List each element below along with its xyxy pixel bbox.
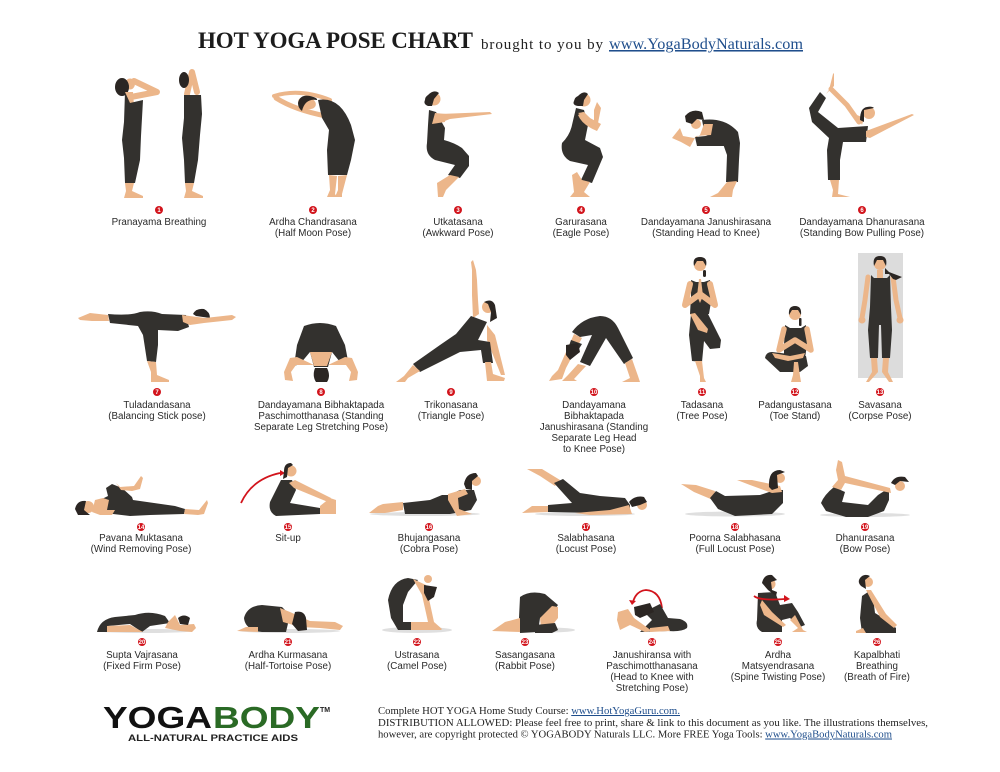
pose 2: Ardha Chandrasana <box>269 93 357 239</box>
label: (Full Locust Pose) <box>696 544 774 555</box>
label: (Fixed Firm Pose) <box>103 661 181 672</box>
badge: 12 <box>792 390 799 396</box>
badge: 21 <box>285 640 292 646</box>
label: Utkatasana <box>433 217 483 228</box>
pose 22: Ustrasana <box>382 575 452 672</box>
title: www.YogaBodyNaturals.com <box>609 36 803 53</box>
logo: YOGABODY <box>103 700 330 744</box>
figure <box>270 463 336 516</box>
badge <box>309 206 317 214</box>
figure <box>522 469 647 515</box>
figure <box>765 306 811 382</box>
badge: 16 <box>426 525 433 531</box>
badge <box>454 206 462 214</box>
label: Pavana Muktasana <box>99 533 183 544</box>
pose 16: Bhujangasana <box>369 473 481 555</box>
figure <box>672 111 740 197</box>
figure <box>858 256 904 382</box>
pose 5: Dandayamana Janushirasana <box>641 111 772 239</box>
label: (Head to Knee with <box>610 672 694 683</box>
label: (Camel Pose) <box>387 661 447 672</box>
badge: 8 <box>319 390 323 396</box>
logo: YOGABODY: TM <box>320 707 330 714</box>
footer text: however, are copyright protected © YOGABODY Naturals LLC. More FREE Yoga Tools: www.YogaBodyNaturals.com <box>378 730 892 740</box>
mat <box>858 253 903 378</box>
label: Dhanurasana <box>836 533 894 544</box>
label: Bhujangasana <box>398 533 460 544</box>
badge: 14 <box>138 525 145 531</box>
pose 1: Pranayama Breathing <box>112 72 206 228</box>
label: (Standing Bow Pulling Pose) <box>800 228 924 239</box>
logo: YOGABODY: ALL-NATURAL PRACTICE AIDS <box>128 733 298 744</box>
pose 19: Dhanurasana <box>820 460 910 555</box>
badge: 26 <box>874 640 881 646</box>
figure <box>809 73 914 197</box>
badge: 15 <box>285 525 292 531</box>
badge: 5 <box>704 208 708 214</box>
pose 4: Garurasana <box>553 92 609 239</box>
label: Ardha <box>765 650 791 661</box>
badge <box>858 206 866 214</box>
pose 26: Kapalbhati Breathing <box>844 575 910 683</box>
shadow <box>382 627 452 633</box>
label: Tuladandasana <box>123 400 191 411</box>
logo: YOGABODY: YOGA <box>103 700 212 735</box>
figure <box>617 603 687 632</box>
figure <box>821 460 909 517</box>
pose 11: Tadasana <box>676 257 728 422</box>
badge: 20 <box>139 640 146 646</box>
logo: YOGABODY: BODY <box>213 700 320 735</box>
label: Sit-up <box>275 533 301 544</box>
label: (Spine Twisting Pose) <box>731 672 825 683</box>
badge: 22 <box>414 640 421 646</box>
label: Savasana <box>858 400 902 411</box>
badge: 9 <box>449 390 453 396</box>
figure <box>369 473 481 516</box>
badge: 13 <box>877 390 884 396</box>
shadow <box>685 512 785 516</box>
pose 15: Sit-up <box>241 463 336 544</box>
label: (Corpse Pose) <box>848 411 912 422</box>
shadow <box>370 512 480 516</box>
pose 21: Ardha Kurmasana <box>237 605 343 672</box>
pose 6: Dandayamana Dhanurasana <box>799 73 925 239</box>
figure <box>424 91 492 197</box>
badge <box>155 206 163 214</box>
figure <box>274 93 355 197</box>
badge <box>447 388 455 396</box>
figure <box>681 470 785 516</box>
pose 10: Dandayamana Bibhaktapada Janushirasana <box>540 316 648 455</box>
label: Breathing <box>856 661 898 672</box>
badge <box>153 388 161 396</box>
badge: 4 <box>579 208 583 214</box>
label: (Toe Stand) <box>770 411 820 422</box>
label: Sasangasana <box>495 650 555 661</box>
arrow: curved motion <box>629 590 662 608</box>
badge: 23 <box>522 640 529 646</box>
arrow: curved motion <box>241 470 285 503</box>
badge: 18 <box>732 525 739 531</box>
badge <box>876 388 884 396</box>
figure <box>284 323 358 382</box>
title <box>198 28 803 53</box>
title: HOT YOGA POSE CHART <box>198 28 473 53</box>
figure <box>237 605 343 632</box>
label: (Wind Removing Pose) <box>91 544 191 555</box>
footer text: DISTRIBUTION ALLOWED: Please feel free to print, share & link to this document as you like. The illustrations themselves, <box>378 718 928 729</box>
pose 25: Ardha Matsyendrasana <box>731 575 825 683</box>
label: (Rabbit Pose) <box>495 661 555 672</box>
badge <box>577 206 585 214</box>
badge: 1 <box>157 208 161 214</box>
label: Pranayama Breathing <box>112 217 206 228</box>
pose 8: Dandayamana Bibhaktapada Paschimotthanasa <box>254 323 388 433</box>
pose 3: Utkatasana <box>422 91 494 239</box>
footer text <box>378 706 928 740</box>
label: Garurasana <box>555 217 607 228</box>
badge: 17 <box>583 525 590 531</box>
shadow <box>535 512 635 516</box>
badge <box>698 388 706 396</box>
figure <box>97 613 196 632</box>
label: Separate Leg Head <box>552 433 636 444</box>
label: (Bow Pose) <box>840 544 890 555</box>
label: Dandayamana Dhanurasana <box>799 217 925 228</box>
label: Trikonasana <box>424 400 478 411</box>
label: (Half-Tortoise Pose) <box>245 661 331 672</box>
title: brought to you by <box>481 37 604 53</box>
label: Stretching Pose) <box>616 683 688 694</box>
label: Tadasana <box>681 400 723 411</box>
label: (Balancing Stick pose) <box>108 411 206 422</box>
figure: side view, hands at chin <box>115 78 157 198</box>
figure <box>562 92 603 197</box>
label: to Knee Pose) <box>563 444 625 455</box>
pose 9: Trikonasana <box>396 260 505 422</box>
pose 20: Supta Vajrasana <box>97 613 196 672</box>
pose 24: Janushiransa with Paschimotthanasana <box>606 590 698 694</box>
pose 14: Pavana Muktasana <box>75 476 208 555</box>
label: Kapalbhati <box>854 650 900 661</box>
label: (Locust Pose) <box>556 544 616 555</box>
label: (Eagle Pose) <box>553 228 609 239</box>
label: (Standing Head to Knee) <box>652 228 760 239</box>
label: Salabhasana <box>557 533 615 544</box>
badge: 25 <box>775 640 782 646</box>
label: Dandayamana Janushirasana <box>641 217 771 228</box>
badge: 2 <box>311 208 315 214</box>
shadow <box>97 629 193 633</box>
figure <box>396 260 505 382</box>
figure <box>856 575 897 633</box>
figure: back view, arms raised <box>179 72 203 198</box>
figure <box>757 575 807 632</box>
badge: 6 <box>860 208 864 214</box>
label: Janushirasana (Standing <box>540 422 648 433</box>
label: Bibhaktapada <box>564 411 625 422</box>
figure <box>685 257 721 382</box>
figure <box>549 316 640 382</box>
label: (Tree Pose) <box>676 411 728 422</box>
badge: 11 <box>699 390 706 396</box>
label: Ustrasana <box>395 650 439 661</box>
label: Paschimotthanasana <box>606 661 698 672</box>
pose 7: Tuladandasana <box>78 309 236 422</box>
label: (Awkward Pose) <box>422 228 494 239</box>
pose 18: Poorna Salabhasana <box>681 470 785 555</box>
label: Padangustasana <box>758 400 832 411</box>
label: Supta Vajrasana <box>106 650 178 661</box>
figure <box>78 309 236 382</box>
label: (Breath of Fire) <box>844 672 910 683</box>
pose 17: Salabhasana <box>522 469 647 555</box>
badge: 19 <box>862 525 869 531</box>
badge: 7 <box>155 390 159 396</box>
shadow <box>240 629 340 633</box>
label: (Half Moon Pose) <box>275 228 351 239</box>
figure <box>492 593 558 633</box>
label: Dandayamana Bibhaktapada <box>258 400 384 411</box>
label: Dandayamana <box>562 400 626 411</box>
badge: 3 <box>456 208 460 214</box>
figure <box>388 575 442 630</box>
pose 23: Sasangasana <box>492 593 575 672</box>
figure <box>75 476 208 516</box>
badge: 10 <box>591 390 598 396</box>
label: Separate Leg Stretching Pose) <box>254 422 388 433</box>
pose 12: Padangustasana <box>758 306 832 422</box>
label: Matsyendrasana <box>742 661 815 672</box>
label: Poorna Salabhasana <box>689 533 781 544</box>
label: Ardha Chandrasana <box>269 217 357 228</box>
arrow: rotation <box>754 595 790 602</box>
badge: 24 <box>649 640 656 646</box>
label: Ardha Kurmasana <box>249 650 327 661</box>
shadow <box>525 628 575 632</box>
shadow <box>820 513 910 517</box>
label: Janushiransa with <box>613 650 691 661</box>
label: (Triangle Pose) <box>418 411 484 422</box>
pose 13: Savasana <box>848 253 912 422</box>
label: Paschimotthanasa (Standing <box>258 411 384 422</box>
footer text: Complete HOT YOGA Home Study Course: www.HotYogaGuru.com. <box>378 706 680 717</box>
label: (Cobra Pose) <box>400 544 458 555</box>
